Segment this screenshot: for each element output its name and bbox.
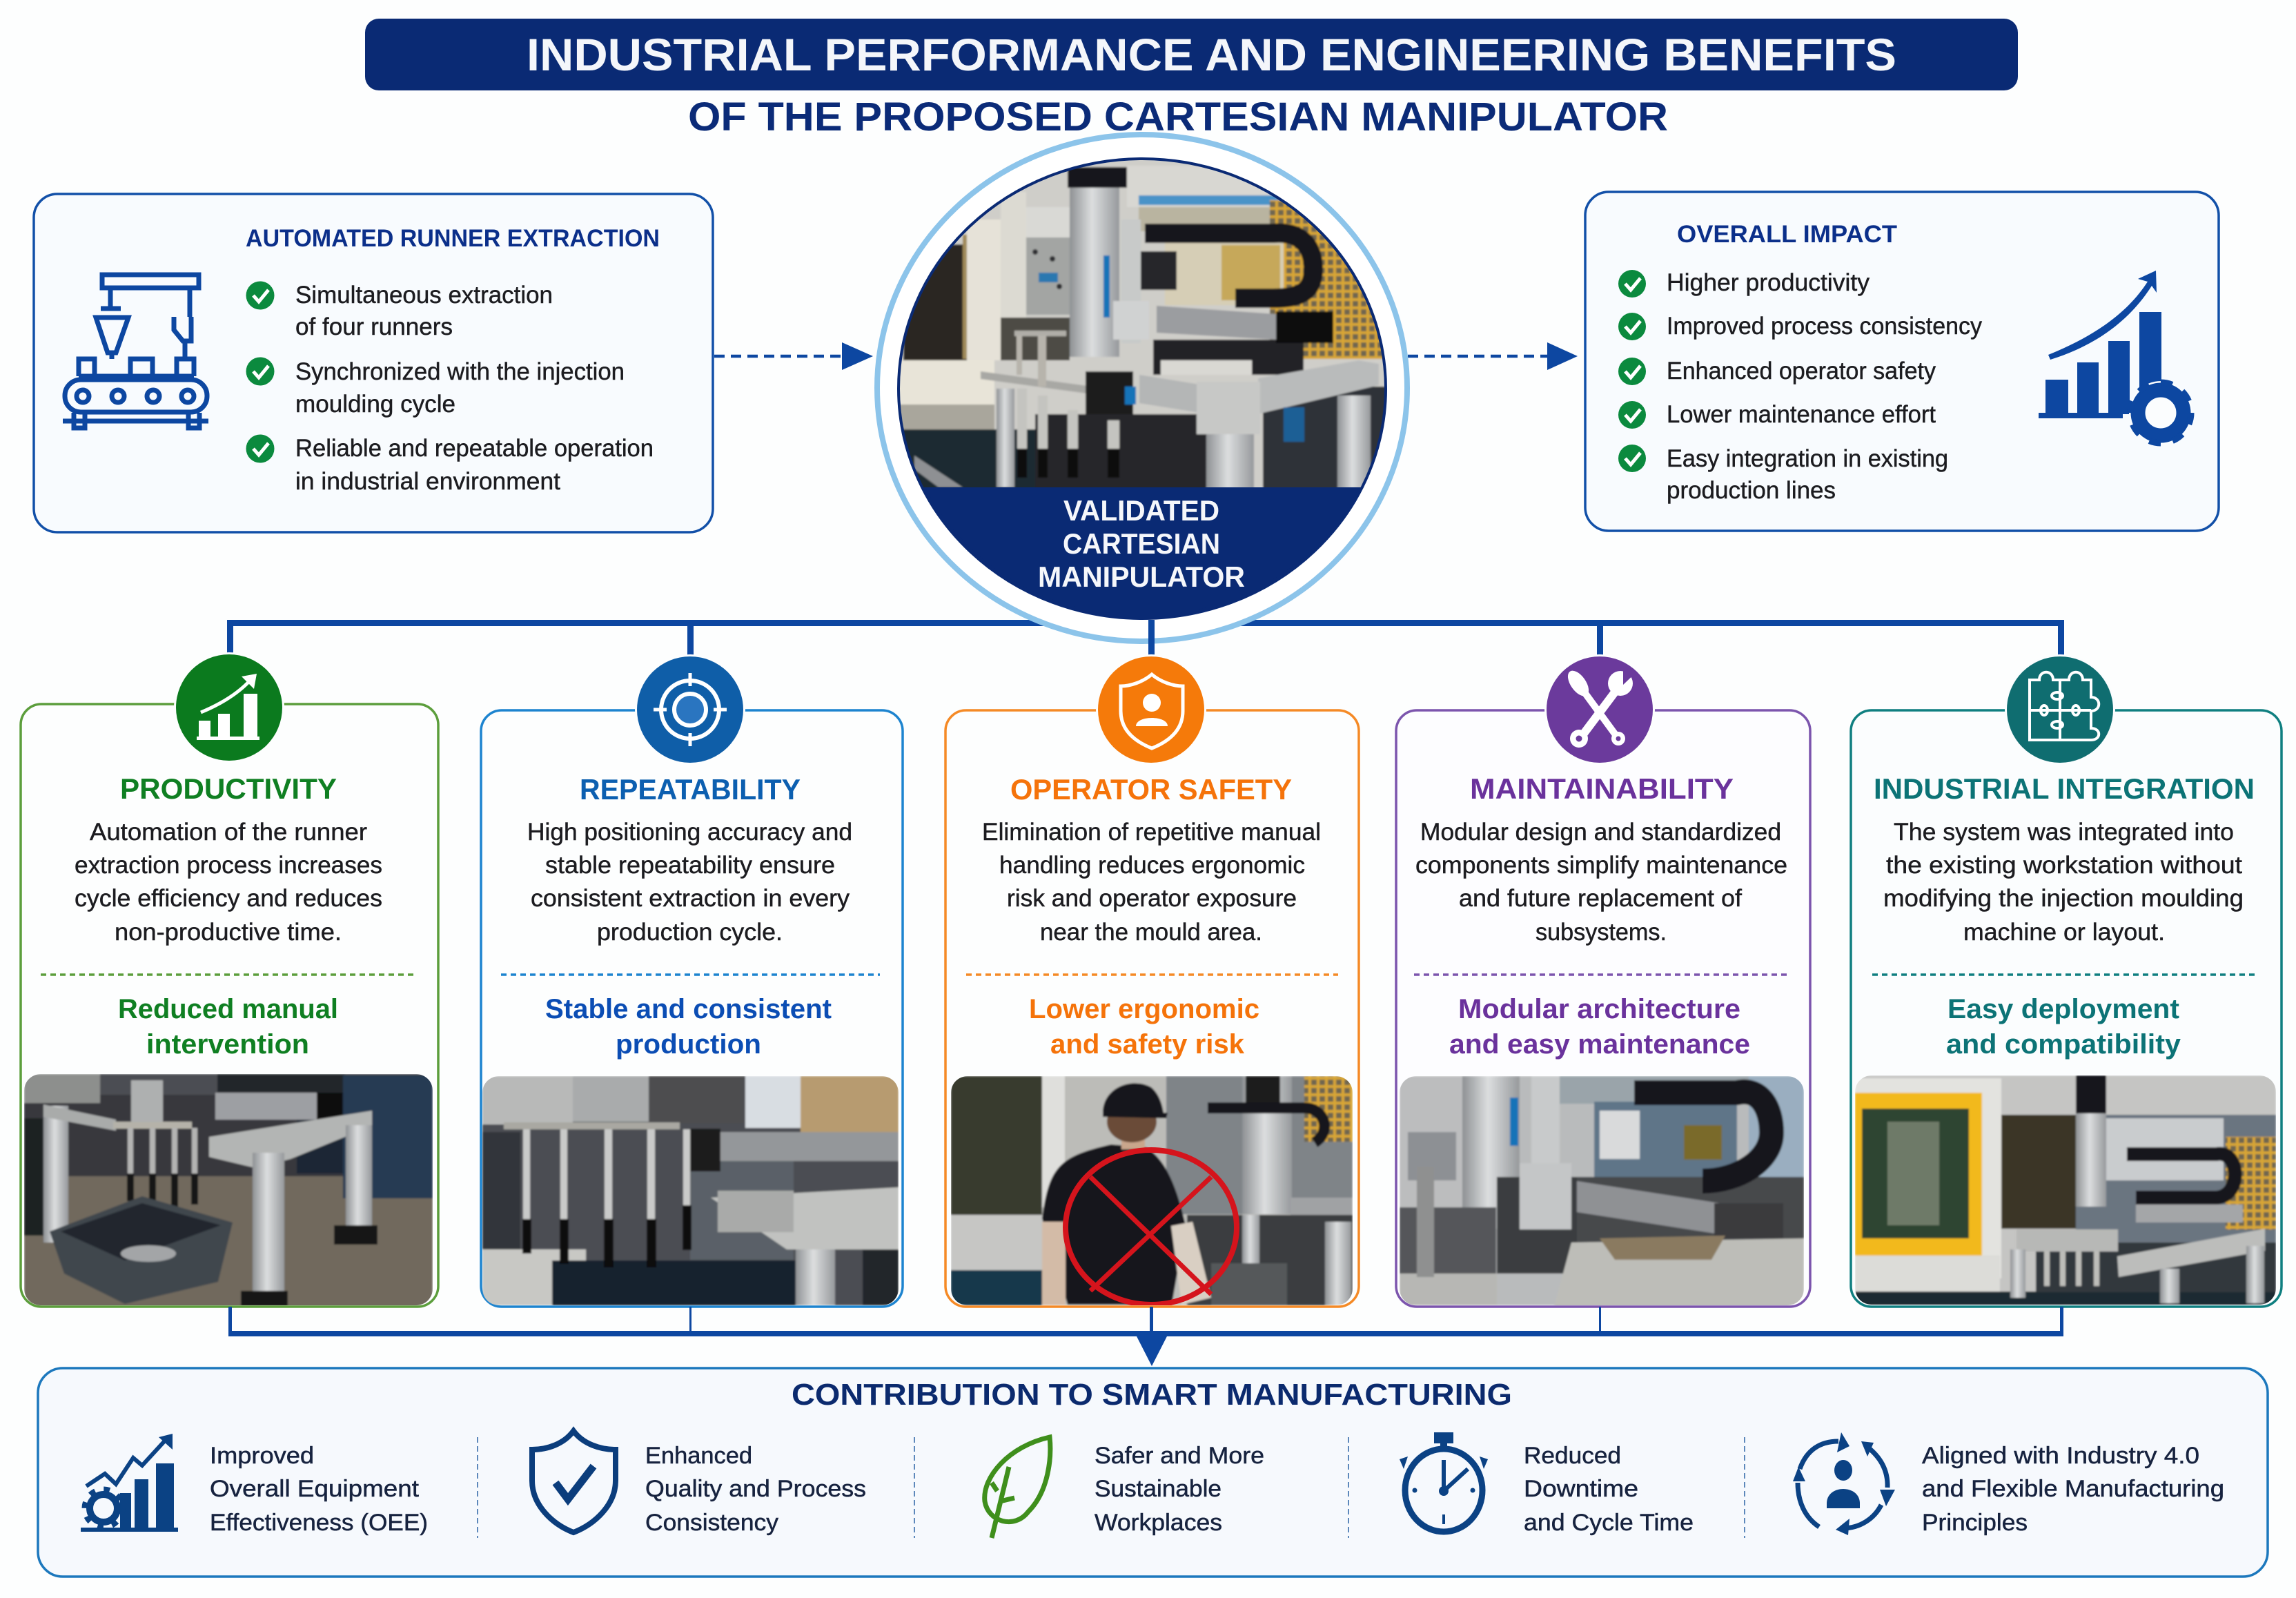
- body text: [75, 819, 382, 946]
- benefit label: Reduced manual: [118, 994, 338, 1024]
- check item 1: [246, 282, 553, 340]
- heading: INDUSTRIAL INTEGRATION: [1874, 772, 2255, 805]
- check list: production lines: [1667, 477, 1836, 504]
- panel: maintainability: [1396, 654, 1810, 1307]
- panel: repeatability: [481, 654, 903, 1307]
- heading: OPERATOR SAFETY: [1010, 773, 1292, 806]
- photo: extraction rods close-up: [482, 1076, 899, 1305]
- check list: Enhanced operator safety: [1667, 358, 1936, 384]
- panel: productivity: [21, 652, 438, 1307]
- badge label: CARTESIAN: [1063, 527, 1220, 560]
- item text: Reduced: [1524, 1443, 1621, 1469]
- icon: target: [635, 654, 745, 765]
- icon: wrench and screwdriver: [1544, 654, 1655, 765]
- heading: REPEATABILITY: [580, 773, 801, 806]
- icon: growth chart with gear: [2039, 271, 2192, 445]
- body text: cycle efficiency and reduces: [75, 885, 382, 912]
- body text: modifying the injection moulding: [1883, 885, 2244, 912]
- benefit label: [1449, 994, 1750, 1060]
- body text: consistent extraction in every: [531, 885, 850, 912]
- body text: [982, 819, 1321, 946]
- arrow: manipulator to impact: [1408, 342, 1578, 370]
- item text: [645, 1443, 866, 1536]
- body text: [1883, 819, 2244, 946]
- check item 2: [246, 358, 625, 418]
- benefit label: [118, 994, 338, 1060]
- central manipulator badge: [877, 135, 1407, 641]
- check item 3: Reliable and repeatable operation: [295, 435, 654, 462]
- icon: leaf: [985, 1437, 1050, 1538]
- icon: productivity chart: [174, 652, 284, 763]
- check item 3: in industrial environment: [295, 468, 560, 495]
- subtitle: OF THE PROPOSED CARTESIAN MANIPULATOR: [688, 95, 1668, 139]
- item text: [1524, 1443, 1694, 1536]
- benefit label: production: [616, 1029, 761, 1060]
- body text: extraction process increases: [75, 852, 382, 879]
- check list: Improved process consistency: [1667, 313, 1982, 340]
- icon: conveyor with extraction tools: [63, 275, 208, 428]
- benefit label: [1029, 994, 1259, 1060]
- benefit label: Modular architecture: [1458, 994, 1740, 1024]
- body text: Automation of the runner: [90, 819, 367, 846]
- panel: automated runner extraction: [34, 194, 713, 532]
- body text: [1415, 819, 1787, 946]
- heading: AUTOMATED RUNNER EXTRACTION: [246, 225, 660, 252]
- item text: Improved: [210, 1443, 314, 1469]
- item: sustainable: [985, 1437, 1264, 1538]
- benefit label: [545, 994, 832, 1060]
- benefit label: intervention: [146, 1029, 309, 1060]
- check item 2: Synchronized with the injection: [295, 358, 625, 385]
- benefit label: and compatibility: [1946, 1029, 2181, 1060]
- item text: Downtime: [1524, 1476, 1638, 1502]
- item text: and Cycle Time: [1524, 1510, 1694, 1536]
- icon: puzzle: [2005, 654, 2115, 765]
- connector bus: bottom with arrow: [228, 1307, 2063, 1366]
- icon: shield with person: [1096, 654, 1206, 765]
- panel: contribution to smart manufacturing: [38, 1368, 2268, 1577]
- body text: non-productive time.: [115, 919, 342, 946]
- item text: Effectiveness (OEE): [210, 1510, 428, 1536]
- title banner: INDUSTRIAL PERFORMANCE AND ENGINEERING BENEFITS: [527, 29, 1896, 80]
- body text: High positioning accuracy and: [527, 819, 852, 846]
- icon: stopwatch: [1400, 1432, 1488, 1532]
- item text: [1095, 1443, 1264, 1536]
- item text: Enhanced: [645, 1443, 752, 1469]
- heading: PRODUCTIVITY: [120, 772, 337, 805]
- check list: Lower maintenance effort: [1667, 401, 1936, 428]
- connector bus: top: [227, 620, 2064, 661]
- body text: machine or layout.: [1963, 919, 2165, 946]
- photo: modular assembly: [1400, 1076, 1804, 1307]
- check list: Higher productivity: [1667, 269, 1870, 296]
- icon: shield check: [532, 1431, 616, 1532]
- benefit label: Lower ergonomic: [1029, 994, 1259, 1024]
- item: OEE: [81, 1434, 428, 1536]
- body text: Modular design and standardized: [1420, 819, 1781, 846]
- item text: [1922, 1443, 2224, 1536]
- item: quality: [532, 1431, 866, 1536]
- benefit label: Stable and consistent: [545, 994, 832, 1024]
- heading: CONTRIBUTION TO SMART MANUFACTURING: [792, 1378, 1512, 1412]
- photo: extraction over bin: [24, 1074, 433, 1307]
- check item 3: [246, 435, 654, 495]
- item: downtime: [1400, 1432, 1694, 1536]
- item: industry 4.0: [1793, 1432, 2224, 1536]
- title banner: [365, 19, 2018, 90]
- item text: Aligned with Industry 4.0: [1922, 1443, 2199, 1469]
- body text: Elimination of repetitive manual: [982, 819, 1321, 846]
- check item 1: Simultaneous extraction: [295, 282, 553, 309]
- benefit label: and safety risk: [1050, 1029, 1245, 1060]
- heading: MAINTAINABILITY: [1470, 772, 1734, 805]
- item text: Consistency: [645, 1510, 778, 1536]
- check list: Easy integration in existing: [1667, 445, 1948, 472]
- body text: handling reduces ergonomic: [999, 852, 1305, 879]
- benefit label: [1946, 994, 2181, 1060]
- icon: chart with gear: [81, 1434, 178, 1532]
- arrow: extraction to manipulator: [714, 342, 873, 370]
- heading: OVERALL IMPACT: [1677, 221, 1897, 248]
- badge label: VALIDATED: [1063, 494, 1219, 527]
- panel: overall impact: [1585, 192, 2219, 531]
- check item 2: moulding cycle: [295, 391, 455, 418]
- panel: industrial integration: [1851, 654, 2282, 1307]
- body text: production cycle.: [597, 919, 783, 946]
- badge label: [1038, 494, 1245, 593]
- body text: the existing workstation without: [1886, 852, 2242, 879]
- photo: validated manipulator: [890, 152, 1394, 491]
- benefit label: and easy maintenance: [1449, 1029, 1750, 1060]
- item text: Principles: [1922, 1510, 2028, 1536]
- item text: Quality and Process: [645, 1476, 866, 1502]
- body text: risk and operator exposure: [1007, 885, 1297, 912]
- photo: integration with injection moulding machine: [1855, 1075, 2276, 1305]
- check item 1: of four runners: [295, 313, 453, 340]
- item text: Sustainable: [1095, 1476, 1221, 1502]
- item text: Safer and More: [1095, 1443, 1264, 1469]
- body text: subsystems.: [1535, 919, 1667, 946]
- badge label: MANIPULATOR: [1038, 561, 1245, 593]
- item text: Workplaces: [1095, 1510, 1222, 1536]
- body text: stable repeatability ensure: [545, 852, 835, 879]
- benefit label: Easy deployment: [1947, 994, 2179, 1024]
- body text: and future replacement of: [1459, 885, 1742, 912]
- icon: person in cycle: [1793, 1432, 1895, 1535]
- check list: [1618, 269, 1982, 504]
- body text: components simplify maintenance: [1415, 852, 1787, 879]
- body text: [527, 819, 852, 946]
- panel: operator safety: [945, 654, 1359, 1307]
- item text: [210, 1443, 428, 1536]
- photo: operator with prohibition mark: [951, 1076, 1353, 1305]
- item text: Overall Equipment: [210, 1476, 420, 1502]
- item text: and Flexible Manufacturing: [1922, 1476, 2224, 1502]
- body text: near the mould area.: [1040, 919, 1262, 946]
- body text: The system was integrated into: [1894, 819, 2234, 846]
